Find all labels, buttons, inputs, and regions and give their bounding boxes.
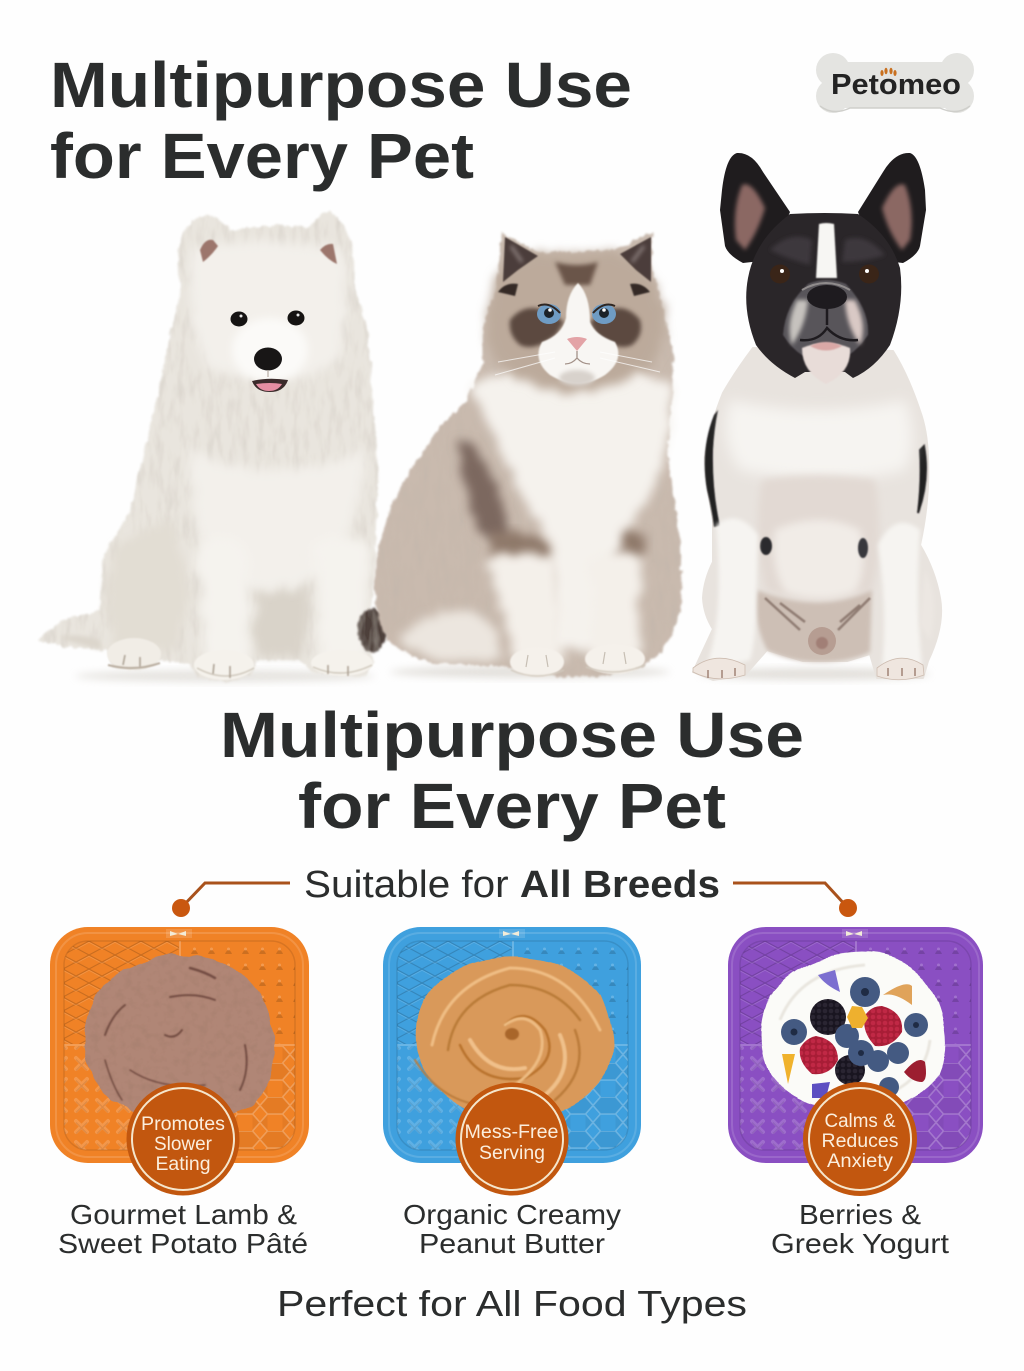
- badge: calms and reduces anxiety: Calms &: [824, 1111, 896, 1132]
- badge: mess-free serving: Serving: [479, 1143, 545, 1164]
- panel: purple lick mat with berries and yogurt: [728, 927, 983, 1163]
- logo: Petomeo bone badge: [816, 53, 974, 113]
- subheading: suitable for all breeds: Suitable for All Breeds: [304, 864, 720, 906]
- badge: calms and reduces anxiety: Reduces: [822, 1131, 898, 1152]
- connector: right pointer: [733, 883, 857, 917]
- label: berries and yogurt: [771, 1199, 949, 1259]
- badge: calms and reduces anxiety: Anxiety: [827, 1151, 894, 1172]
- badge: mess-free serving: [456, 1082, 568, 1196]
- label: lamb pate: Gourmet Lamb &: [70, 1199, 297, 1230]
- label: peanut butter: Organic Creamy: [403, 1199, 621, 1230]
- heading: centered title: for Every Pet: [298, 770, 726, 842]
- badge: promotes slower eating: Eating: [156, 1154, 210, 1175]
- illustration: french bulldog: [693, 153, 941, 680]
- panel: blue lick mat with peanut butter: [383, 927, 641, 1163]
- illustration: ragdoll cat: [358, 232, 682, 678]
- illustration: white samoyed puppy: [37, 212, 377, 682]
- label: lamb pate: [58, 1199, 308, 1259]
- badge: promotes slower eating: Promotes: [141, 1114, 225, 1135]
- title: top heading: for Every Pet: [50, 120, 474, 192]
- heading: centered title: [220, 699, 804, 842]
- badge: promotes slower eating: [126, 1082, 240, 1196]
- badge: mess-free serving: Mess-Free: [464, 1122, 558, 1143]
- panel: orange lick mat with lamb pate: [50, 927, 309, 1163]
- label: lamb pate: Sweet Potato Pâté: [58, 1228, 308, 1259]
- label: peanut butter: Peanut Butter: [419, 1228, 605, 1259]
- badge: promotes slower eating: Slower: [154, 1134, 213, 1155]
- caption: perfect for all food types: Perfect for All Food Types: [277, 1283, 747, 1324]
- label: berries and yogurt: Berries &: [799, 1199, 921, 1230]
- badge: calms and reduces anxiety: [803, 1082, 917, 1196]
- label: peanut butter: [403, 1199, 621, 1259]
- label: berries and yogurt: Greek Yogurt: [771, 1228, 949, 1259]
- title: top heading: Multipurpose Use: [50, 49, 632, 121]
- title: top heading: [50, 49, 632, 192]
- logo: Petomeo bone badge: Petomeo: [831, 69, 961, 101]
- heading: centered title: Multipurpose Use: [220, 699, 804, 771]
- connector: left pointer: [172, 883, 290, 917]
